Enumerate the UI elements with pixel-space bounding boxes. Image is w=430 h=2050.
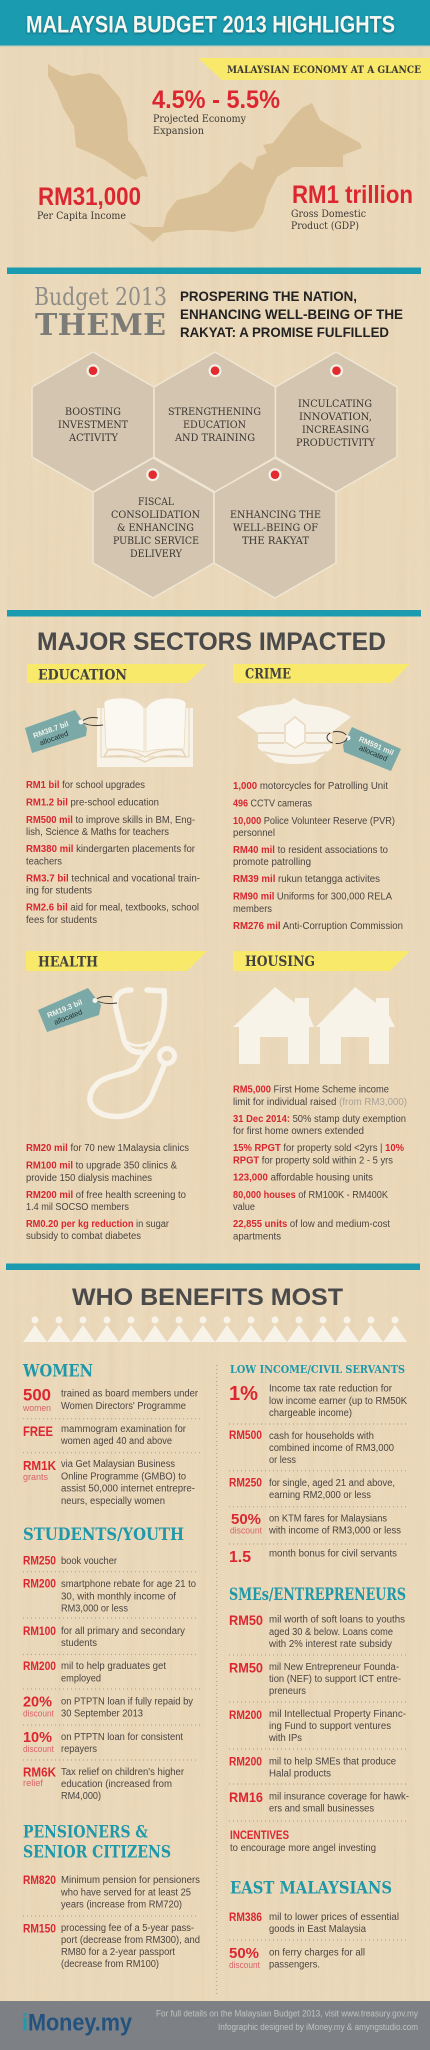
item: RM50 soft loans: mil worth of soft loans to youths [269,1614,405,1625]
list: health items: subsidy to combat diabetes [26,1231,141,1242]
stat: economy expansion [152,86,280,137]
item: RM50 soft loans: aged 30 & below. Loans come [269,1627,393,1638]
item: RM820 minimum pension: years (increase from RM720) [61,1900,182,1911]
heading: Budget 2013 Theme: THEME [35,308,166,343]
panel: pensioners and senior citizens [23,1823,200,1970]
tag: RM19.3 bil allocated [38,988,117,1032]
item: RM200 halal products [229,1757,396,1780]
stat: economy expansion: Expansion [153,126,205,137]
list: education items [26,780,200,926]
item: RM200 intellectual property: RM200 [229,1710,262,1722]
item: 500 women: 500 [23,1386,51,1405]
item: RM200 smartphone rebate: RM3,000 or less [61,1604,128,1614]
item: 10% discount: repayers [61,1744,97,1755]
hexagon: enhancing well-being: ENHANCING THE [230,510,321,521]
item: RM386 lower prices: RM386 [229,1912,262,1924]
list: crime items: RM90 mil Uniforms for 300,000 RELA [233,892,392,902]
tag: RM591 mil allocated: allocated [358,743,389,763]
item: RM200 halal products: mil to help SMEs that produce [269,1757,396,1768]
tag: RM38.7 bil allocated: allocated [38,729,70,748]
item: RM250 book voucher [23,1556,118,1568]
item: free mammogram: FREE [23,1423,53,1439]
item: RM150 passport fee: RM150 [23,1924,56,1936]
list: housing items: 80,000 houses of RM100K - RM400K [233,1190,388,1201]
item: RM200 intellectual property: with IPs [268,1733,302,1744]
hexagon: fiscal consolidation: CONSOLIDATION [111,510,200,521]
list: crime items: personnel [233,828,275,839]
theme statement: ENHANCING WELL-BEING OF THE [180,306,403,322]
item: RM6K relief: RM6K [23,1765,57,1780]
list: housing items: 123,000 affordable housing units [233,1173,373,1184]
list: crime items: RM40 mil to resident associations to [233,845,388,856]
ribbon: housing [233,951,410,971]
item: 10% discount: 10% [23,1729,52,1746]
tag: RM591 mil allocated: RM591 mil [358,734,395,757]
item: RM200 halal products: Halal products [269,1769,331,1780]
item: RM1K grants: via Get Malaysian Business [61,1459,175,1470]
stat: GDP: Gross Domestic [291,209,366,220]
item: 50% KTM discount: discount [230,1526,262,1536]
hexagon: enhancing well-being [214,458,336,598]
item: RM1K grants: neurs, especially women [61,1496,165,1507]
icon: open book [97,698,193,767]
item: 500 women: women [22,1403,51,1413]
heading: pensioners [23,1823,171,1863]
list: housing items: for first home owners extended [233,1126,364,1137]
item: incentives: INCENTIVES [230,1828,289,1842]
list: health items: RM20 mil for 70 new 1Malaysia clinics [26,1143,189,1154]
item: RM50 soft loans: with 2% interest rate subsidy [268,1639,392,1650]
stat: GDP [291,181,413,232]
hexagon: inculcating innovation: PRODUCTIVITY [296,438,375,449]
hexagon: strengthening education [154,352,276,492]
ribbon: education [27,664,207,684]
list: crime items: RM276 mil Anti-Corruption Commission [233,921,403,932]
theme statement: PROSPERING THE NATION, [180,288,357,304]
item: RM50 entrepreneur foundation: RM50 [229,1660,263,1676]
item: RM820 minimum pension [23,1875,200,1911]
item: RM6K relief: Tax relief on children's higher [61,1767,185,1778]
item: RM200 smartphone rebate: smartphone rebate for age 21 to [61,1579,196,1590]
list: health items: RM0.20 per kg reduction in sugar [26,1219,170,1230]
hexagon: fiscal consolidation [93,458,214,598]
item: 20% discount: 20% [23,1694,52,1711]
list: education items: fees for students [26,915,97,926]
item: RM820 minimum pension: who have served for at least 25 [60,1888,191,1899]
item: RM50 soft loans: RM50 [229,1612,263,1628]
panel: SMEs and entrepreneurs [229,1585,409,1854]
icon: stethoscope [90,990,174,1116]
hexagon: fiscal consolidation: FISCAL [138,497,174,508]
item: RM100 for students [23,1626,185,1649]
list: education items: RM1 bil for school upgrades [26,780,145,791]
list: crime items: 496 CCTV cameras [233,798,312,810]
list: health items [26,1143,189,1242]
ribbon: crime: CRIME [245,666,291,682]
list: housing items: RPGT for property sold within 2 - 5 yrs [233,1156,393,1167]
item: RM50 soft loans [229,1612,405,1650]
title banner [0,0,430,47]
list: crime items: 10,000 Police Volunteer Reserve (PVR) [233,816,395,827]
item: RM1K grants: assist 50,000 internet entrepre- [61,1484,195,1494]
item: 20% discount: discount [23,1709,54,1719]
item: RM386 lower prices [229,1912,399,1935]
list: health items: RM100 mil to upgrade 350 clinics & [26,1161,177,1172]
item: RM250 book voucher: book voucher [61,1556,118,1567]
item: RM100 for students: RM100 [23,1626,56,1638]
item: 20% discount [23,1694,193,1720]
item: RM200 intellectual property: mil Intellectual Property Financ- [269,1709,406,1720]
item: RM16 insurance coverage: mil insurance coverage for hawk- [269,1792,409,1803]
hexagon: inculcating innovation: INNOVATION, [299,412,372,423]
ribbon: economy at a glance [198,58,430,80]
stat: GDP: Product (GDP) [291,221,359,232]
item: 10% discount: discount [23,1744,54,1754]
item: RM200 halal products: RM200 [229,1757,262,1769]
list: crime items [233,781,403,932]
item: RM6K relief: relief [23,1778,44,1788]
list: crime items: 1,000 motorcycles for Patrolling Unit [233,781,388,792]
item: RM50 entrepreneur foundation: preneurs [269,1686,306,1697]
theme statement: RAKYAT: A PROMISE FULFILLED [180,324,389,340]
heading: Budget 2013 Theme [34,283,167,343]
item: free mammogram: women aged 40 and above [60,1436,172,1447]
panel: low income and civil servants [229,1362,407,1566]
panel: students and youth [23,1525,203,1802]
item: 50% ferry discount [229,1945,365,1971]
hexagon: inculcating innovation: INCULCATING [298,399,372,410]
item: RM50 entrepreneur foundation: mil New Entrepreneur Founda- [269,1662,399,1673]
list: health items: provide 150 dialysis machines [26,1173,152,1184]
item: 500 women: Women Directors' Programme [61,1401,186,1412]
item: 50% KTM discount [230,1511,401,1536]
item: RM200 for graduates [23,1661,166,1685]
logo: iMoney.my: iMoney.my [22,2010,133,2037]
tag: RM19.3 bil allocated: RM19.3 bil [46,998,84,1020]
list: education items: teachers [26,856,62,868]
item: RM1K grants: grants [23,1472,48,1482]
item: 1% tax reduction: low income earner (up to RM50K [269,1396,407,1407]
hexagon: fiscal consolidation: PUBLIC SERVICE [113,536,199,547]
panel: housing [233,951,410,1243]
item: RM250 book voucher: RM250 [23,1556,56,1568]
heading: east malaysians: EAST MALAYSIANS [230,1879,392,1899]
item: RM200 intellectual property: ing Fund to support ventures [269,1721,391,1732]
list: housing items: 22,855 units of low and medium-cost [233,1219,390,1230]
item: 50% ferry discount: on ferry charges for all [269,1948,365,1959]
hexagon: boosting investment: ACTIVITY [68,433,118,444]
item: 500 women: trained as board members under [61,1389,199,1400]
panel: crime [233,664,410,932]
hexagon: fiscal consolidation: & ENHANCING [117,523,194,534]
item: 10% discount: on PTPTN loan for consistent [61,1732,183,1743]
ribbon: education: EDUCATION [38,668,127,684]
panel: health [26,951,207,1242]
item: RM500 cash: cash for households with [269,1431,374,1442]
tag: RM19.3 bil allocated: allocated [52,1007,84,1027]
item: 1% tax reduction: Income tax rate reduction for [269,1384,393,1395]
theme statement [180,288,403,340]
hexagon: strengthening education: AND TRAINING [174,433,255,444]
item: RM150 passport fee [23,1923,200,1970]
item: 50% ferry discount: passengers. [269,1960,320,1971]
item: RM200 for graduates: RM200 [23,1661,56,1673]
item: RM386 lower prices: mil to lower prices of essential [269,1912,399,1923]
list: education items: lish, Science & Maths for teachers [26,827,169,838]
panel: economy at a glance [37,58,430,242]
panel: east malaysians [229,1879,407,1971]
item: RM150 passport fee: RM80 for a 2-year passport [61,1947,175,1958]
item: RM500 cash: combined income of RM3,000 [269,1443,394,1454]
panel: budget theme [32,283,403,598]
item: 1% tax reduction: 1% [229,1383,258,1405]
list: crime items: members [233,904,272,915]
list: education items: RM500 mil to improve skills in BM, Eng- [26,815,195,826]
item: incentives [230,1828,376,1854]
item: RM200 for graduates: mil to help graduates get [61,1661,166,1672]
item: 1.5 month bonus [229,1549,397,1566]
ribbon: crime [233,664,410,683]
ribbon: health [26,951,207,971]
item: RM150 passport fee: port (decrease from RM300), and [61,1935,200,1946]
heading: major sectors impacted: MAJOR SECTORS IMPACTED [37,628,386,656]
item: RM200 smartphone rebate: RM200 [23,1579,56,1591]
item: RM200 smartphone rebate [23,1579,196,1614]
footer [0,2001,430,2050]
item: RM820 minimum pension: Minimum pension for pensioners [61,1875,200,1886]
item: RM820 minimum pension: RM820 [23,1875,56,1887]
tag: RM591 mil allocated [327,727,401,771]
item: RM150 passport fee: (decrease from RM100) [61,1959,159,1970]
item: RM1K grants: Online Programme (GMBO) to [61,1472,186,1482]
item: RM200 smartphone rebate: 30, with monthly income of [61,1592,176,1602]
list: health items: 1.4 mil SOCSO members [26,1202,129,1213]
item: 1.5 month bonus: 1.5 [229,1549,251,1566]
item: RM16 insurance coverage: ers and small businesses [269,1804,374,1815]
item: free mammogram: mammogram examination for [61,1424,187,1435]
icon: row of people [23,1316,407,1342]
stat: economy expansion: 4.5% - 5.5% [152,86,280,114]
list: education items: RM1.2 bil pre-school education [26,798,159,808]
item: 20% discount: 30 September 2013 [61,1709,143,1720]
item: RM500 cash [229,1430,394,1466]
hexagon: boosting investment: INVESTMENT [58,420,128,431]
list: housing items: RM5,000 First Home Scheme income [233,1085,389,1096]
item: 50% ferry discount: discount [229,1960,260,1970]
item: RM250 for single: for single, aged 21 and above, [269,1478,395,1489]
item: 1% tax reduction [229,1383,407,1419]
list: housing items: 15% RPGT for property sold <2yrs | 10% [233,1143,404,1154]
hexagon: boosting investment: BOOSTING [65,407,121,418]
item: RM500 cash: or less [269,1455,296,1466]
item: RM200 intellectual property [229,1709,406,1744]
hexagon: boosting investment [32,352,154,492]
item: RM16 insurance coverage [229,1789,409,1815]
item: RM6K relief: RM4,000) [61,1791,101,1802]
item: 50% KTM discount: with income of RM3,000 or less [268,1525,401,1536]
icon: houses [233,987,395,1064]
map of Malaysia [48,64,362,242]
hexagon: strengthening education: STRENGTHENING [168,407,261,418]
list: housing items [233,1085,407,1243]
list: health items: RM200 mil of free health screening to [26,1190,186,1201]
item: free mammogram [23,1423,187,1447]
list: education items: RM3.7 bil technical and vocational train- [26,874,200,884]
stat: per capita income: RM31,000 [38,183,141,211]
panel: education [25,664,207,926]
item: 1.5 month bonus: month bonus for civil servants [269,1549,397,1560]
stat: per capita income [37,183,141,222]
stat: per capita income: Per Capita Income [37,211,126,222]
heading: students/youth: STUDENTS/YOUTH [23,1525,184,1545]
item: RM100 for students: students [61,1638,97,1649]
hexagon: enhancing well-being: THE RAKYAT [242,536,309,547]
item: RM50 entrepreneur foundation: tion (NEF) to support ICT entre- [269,1674,401,1685]
list: housing items: apartments [233,1232,281,1243]
item: RM6K relief: education (increased from [61,1779,172,1790]
item: RM386 lower prices: goods in East Malaysia [269,1924,366,1935]
list: crime items: RM39 mil rukun tetangga activites [233,874,380,885]
list: housing items: limit for individual raised (from RM3,000) [233,1097,407,1108]
list: education items: RM380 mil kindergarten placements for [26,844,196,855]
heading: who benefits most: WHO BENEFITS MOST [72,1284,343,1311]
footer credits [156,2009,418,2032]
item: RM1K grants: RM1K [23,1458,57,1473]
item: 50% ferry discount: 50% [229,1945,259,1962]
item: 500 women [22,1386,199,1413]
list: education items: ing for students [26,886,92,896]
heading: pensioners: SENIOR CITIZENS [23,1843,171,1863]
heading: pensioners: PENSIONERS & [23,1823,149,1843]
list: education items: RM2.6 bil aid for meal, textbooks, school [26,902,199,914]
item: 10% discount [23,1729,183,1755]
stat: economy expansion: Projected Economy [153,114,246,125]
item: RM100 for students: for all primary and secondary [61,1626,185,1637]
item: 20% discount: on PTPTN loan if fully repaid by [61,1697,193,1708]
item: RM150 passport fee: processing fee of a 5-year pass- [61,1923,194,1934]
ribbon: health: HEALTH [38,954,98,970]
list: crime items: promote patrolling [233,857,311,868]
item: 1% tax reduction: chargeable income) [269,1408,352,1419]
hexagon: enhancing well-being: WELL-BEING OF [233,523,318,534]
tag: RM38.7 bil allocated: RM38.7 bil [32,719,70,740]
item: RM16 insurance coverage: RM16 [229,1789,263,1805]
item: RM250 for single: earning RM2,000 or less [269,1490,371,1501]
item: RM200 for graduates: employed [61,1674,101,1685]
tag: RM38.7 bil allocated [25,710,103,753]
item: RM6K relief [23,1765,185,1802]
hexagon: fiscal consolidation: DELIVERY [130,549,182,560]
panel: women [22,1362,203,1507]
stat: GDP: RM1 trillion [292,181,413,209]
hexagon: inculcating innovation: INCREASING [302,425,369,436]
icon: police cap [237,698,351,764]
item: RM500 cash: RM500 [229,1430,262,1442]
item: RM250 for single [229,1478,395,1501]
item: RM250 for single: RM250 [229,1478,262,1490]
list: housing items: value [233,1202,255,1213]
item: RM1K grants [23,1458,195,1507]
item: RM50 entrepreneur foundation [229,1660,401,1697]
list: housing items: 31 Dec 2014: 50% stamp duty exemption [233,1114,406,1125]
hexagon: inculcating innovation [276,352,397,492]
hexagon: strengthening education: EDUCATION [183,420,246,431]
ribbon: housing: HOUSING [245,954,315,970]
item: 50% KTM discount: on KTM fares for Malaysians [269,1514,387,1525]
heading: women: WOMEN [22,1362,93,1382]
item: incentives: to encourage more angel investing [230,1843,376,1854]
item: 50% KTM discount: 50% [231,1511,261,1528]
heading: Budget 2013 Theme: Budget 2013 [34,283,167,311]
